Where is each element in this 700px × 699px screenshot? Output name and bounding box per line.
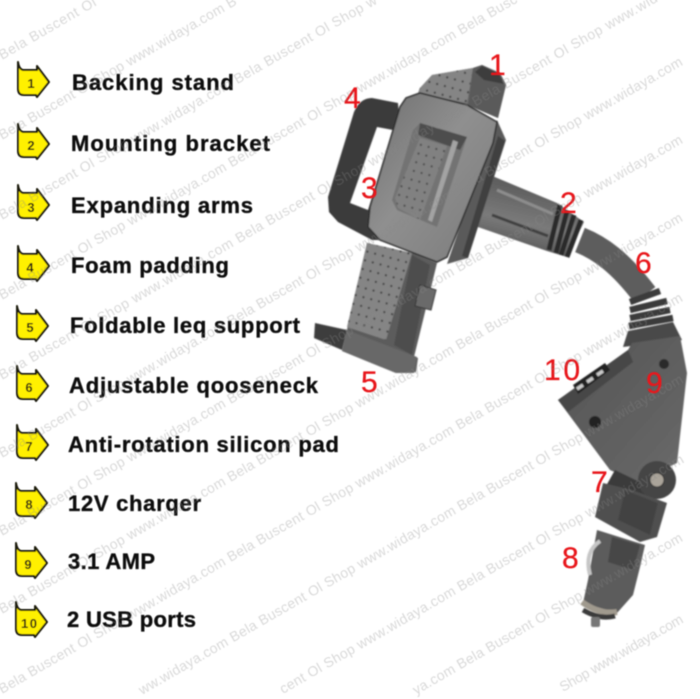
red part numbers: 3: [361, 172, 378, 205]
legend item 5: [17, 306, 301, 341]
legend item 9: 9: [24, 557, 32, 572]
legend item 3: 3: [27, 200, 35, 215]
legend item 4: Foam padding: [71, 253, 229, 278]
legend item 10: [16, 602, 196, 637]
legend item 9: [16, 543, 155, 578]
legend item 3: Expanding arms: [71, 193, 253, 218]
legend item 2: 2: [27, 138, 35, 153]
legend item 8: [16, 483, 201, 518]
red part numbers: 4: [344, 82, 361, 115]
legend item 2: [18, 124, 271, 159]
legend labels: [16, 62, 339, 637]
legend item 8: 8: [25, 497, 33, 512]
red part numbers: 8: [562, 542, 579, 575]
legend item 3: [18, 185, 253, 220]
watermark: ya.com Bela Buscent Ol Shop www.widaya.com: [410, 529, 685, 698]
legend item 6: [17, 366, 319, 401]
flexible neck: [549, 205, 682, 347]
legend item 5: Foldable leq support: [70, 313, 301, 338]
legend item 8: 12V charqer: [68, 491, 201, 516]
watermark: Bela Buscent Ol Shop www.widaya.com Bela Buscent Ol Shop www.widaya.com Bela Buscent Ol Shop www.widaya.com: [0, 289, 685, 697]
red part numbers: 2: [560, 187, 577, 220]
watermark: Shop www.widaya.com: [556, 611, 686, 695]
red part numbers: 10: [544, 354, 580, 387]
red part numbers: 5: [361, 366, 378, 399]
legend item 1: Backing stand: [72, 70, 234, 95]
legend item 7: [17, 425, 339, 460]
legend item 9: 3.1 AMP: [68, 549, 155, 574]
backing stand: [418, 65, 506, 118]
watermark: cent Ol Shop www.widaya.com Bela Buscent Ol Shop www.widaya.com: [276, 451, 686, 697]
legend item 10: 10: [21, 616, 37, 631]
red part numbers: 7: [591, 466, 608, 499]
charger body: [558, 336, 687, 503]
red part numbers: [344, 49, 663, 575]
foldable leg support: [314, 243, 437, 373]
red part numbers: 6: [635, 247, 652, 280]
gooseneck arm: [475, 175, 584, 257]
car plug: [582, 483, 667, 627]
watermark: Bela Buscent Ol Shop www.widaya.com Bela Buscent Ol Shop www.widaya.com Bela Buscent Ol Shop www.widaya.com: [0, 131, 685, 539]
legend item 7: Anti-rotation silicon pad: [68, 432, 339, 457]
red part numbers: 1: [489, 49, 506, 82]
watermark: Bela Buscent Ol Shop www.widaya.com Bela Buscent Ol Shop www.widaya.com Bela Buscent Ol Shop www.widaya.com: [0, 53, 685, 461]
watermark: ww.widaya.com Bela Buscent Ol Shop www.widaya.com Bela Buscent Ol Shop www.widaya.com: [135, 371, 686, 698]
legend item 1: 1: [27, 76, 35, 91]
legend item 5: 5: [26, 320, 34, 335]
legend item 7: 7: [25, 439, 33, 454]
legend item 2: Mounting bracket: [71, 131, 271, 156]
legend item 6: 6: [25, 380, 33, 395]
red part numbers: 9: [646, 367, 663, 400]
product: phone holder: [314, 65, 687, 627]
legend item 6: Adjustable qooseneck: [69, 373, 319, 398]
legend item 1: [18, 62, 234, 97]
legend item 4: 4: [26, 260, 34, 275]
mounting bracket: [368, 93, 506, 264]
legend item 4: [18, 246, 229, 281]
legend item 10: 2 USB ports: [67, 607, 196, 632]
watermark: Bela Buscent Ol Shop www.widaya.com Bela Buscent Ol Shop www.widaya.com Bela Buscent Ol Shop www.widaya.com: [0, 209, 685, 617]
expanding arm handle: [328, 98, 400, 240]
